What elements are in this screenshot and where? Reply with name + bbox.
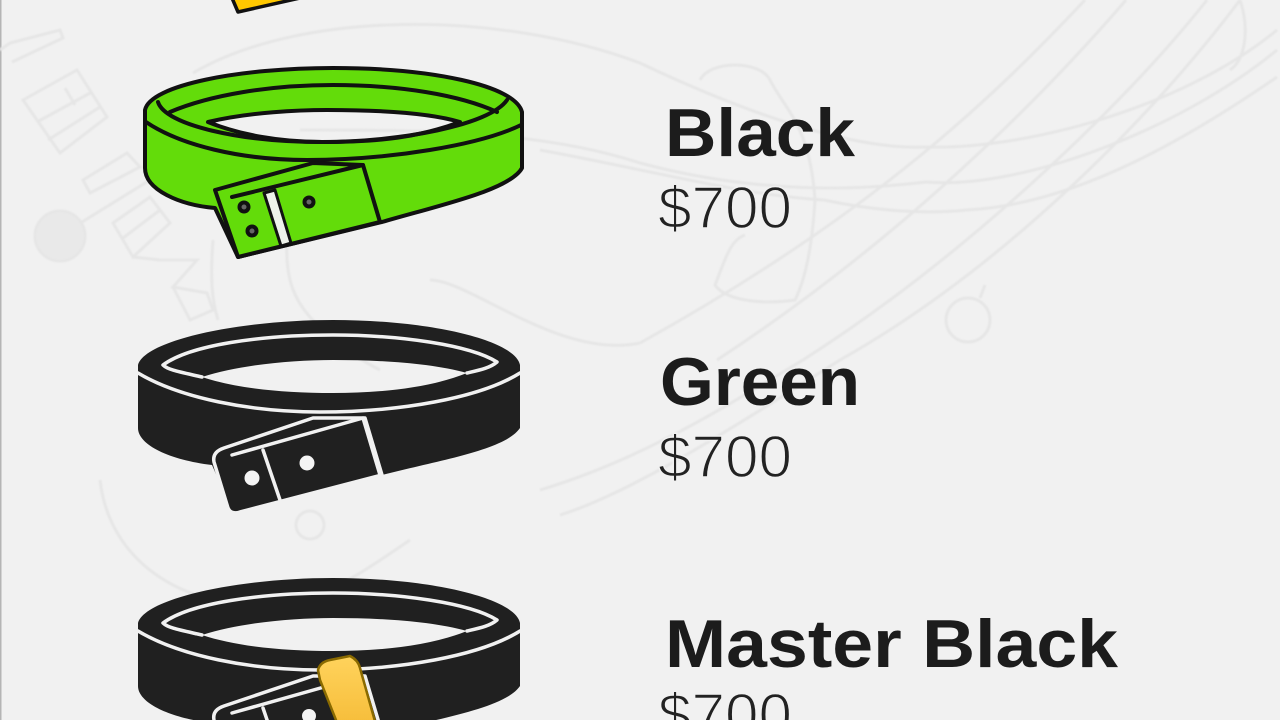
label: Green: Green: [660, 344, 860, 420]
label: Master Black: Master Black: [665, 606, 1118, 682]
icon: yellow belt tip: [232, 0, 300, 12]
icon: gold bar: [318, 656, 376, 720]
row: black belt rank: [145, 68, 855, 257]
icon: green belt: [145, 68, 522, 257]
price: $700: $700: [658, 175, 792, 241]
price: $700: $700: [658, 424, 792, 490]
icon: master black belt: [138, 578, 520, 720]
row: master black belt rank: [138, 578, 1118, 720]
row: green belt rank: [138, 320, 860, 513]
label: Black: Black: [665, 95, 855, 171]
icon: black belt: [138, 320, 520, 513]
